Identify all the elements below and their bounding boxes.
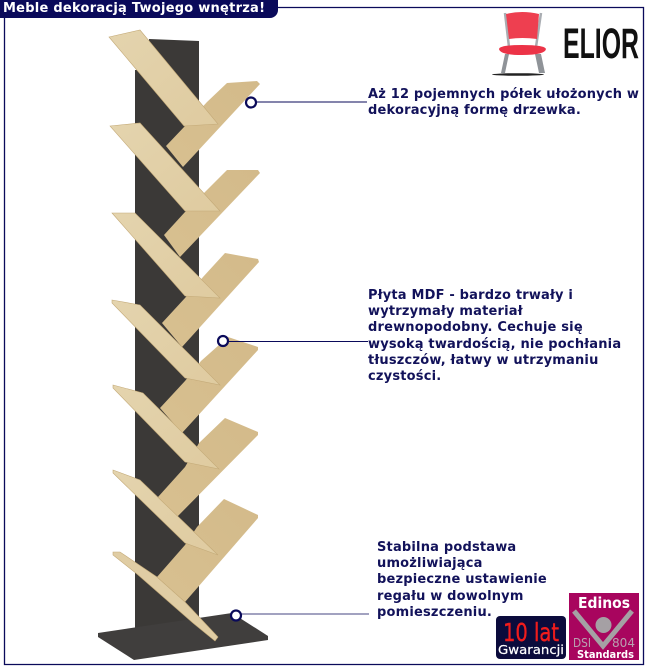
- badge: Edinos standards: Edinos: [578, 594, 630, 612]
- text: stable base: Stabilna podstawa: [377, 540, 516, 555]
- bookshelf: [98, 30, 268, 660]
- badge: 10 year warranty: 10 lat: [503, 618, 559, 647]
- badge: Edinos standards: Standards: [577, 649, 634, 661]
- text: MDF board: wytrzymały materiał: [368, 304, 523, 319]
- text: stable base: umożliwiająca: [377, 556, 483, 571]
- text: stable base: bezpieczne ustawienie: [377, 572, 547, 587]
- badge: Edinos standards: [569, 593, 639, 661]
- right shelf 2: [164, 170, 260, 257]
- left shelf 6: [113, 470, 218, 555]
- badge: Edinos standards: DSI: [573, 636, 591, 650]
- left shelf 7: [113, 552, 218, 641]
- right shelf 1: [166, 81, 260, 167]
- text: stable base: pomieszczeniu.: [377, 605, 492, 620]
- text: MDF board: wysoką twardością, nie pochłania: [368, 337, 621, 352]
- text: MDF board: czystości.: [368, 369, 441, 384]
- badge: 10 year warranty: [496, 616, 566, 659]
- left shelf 4: [112, 300, 220, 385]
- left shelf 2: [110, 123, 220, 211]
- right shelf 6: [157, 499, 258, 602]
- text: shelves: Aż 12 pojemnych półek ułożonych w: [368, 87, 639, 102]
- badge: 10 year warranty: Gwarancji: [498, 643, 564, 657]
- base: [98, 613, 268, 660]
- right shelf 4: [160, 337, 258, 433]
- text: stable base: [377, 540, 547, 620]
- left shelf 3: [112, 213, 220, 298]
- callout 3 marker: [231, 610, 369, 620]
- text: MDF board: tłuszczów, łatwy w utrzymaniu: [368, 353, 599, 368]
- text: MDF board: Płyta MDF - bardzo trwały i: [368, 288, 573, 303]
- back panel: [135, 39, 199, 640]
- badge: Edinos standards: 804: [612, 636, 635, 650]
- title: Meble dekoracją Twojego wnętrza!: [3, 1, 265, 16]
- left shelf 1: [109, 30, 218, 126]
- text: stable base: regału w dowolnym: [377, 589, 524, 604]
- text: MDF board: drewnopodobny. Cechuje się: [368, 320, 583, 335]
- text: MDF board: [368, 288, 621, 384]
- callout 2 marker: [218, 336, 368, 346]
- text: shelves: dekoracyjną formę drzewka.: [368, 103, 581, 118]
- text: shelves: [368, 87, 639, 118]
- right shelf 3: [162, 253, 259, 347]
- logo: chair icon: [492, 12, 546, 76]
- left shelf 5: [113, 385, 219, 469]
- callout 1 marker: [246, 98, 367, 108]
- right shelf 5: [158, 418, 258, 519]
